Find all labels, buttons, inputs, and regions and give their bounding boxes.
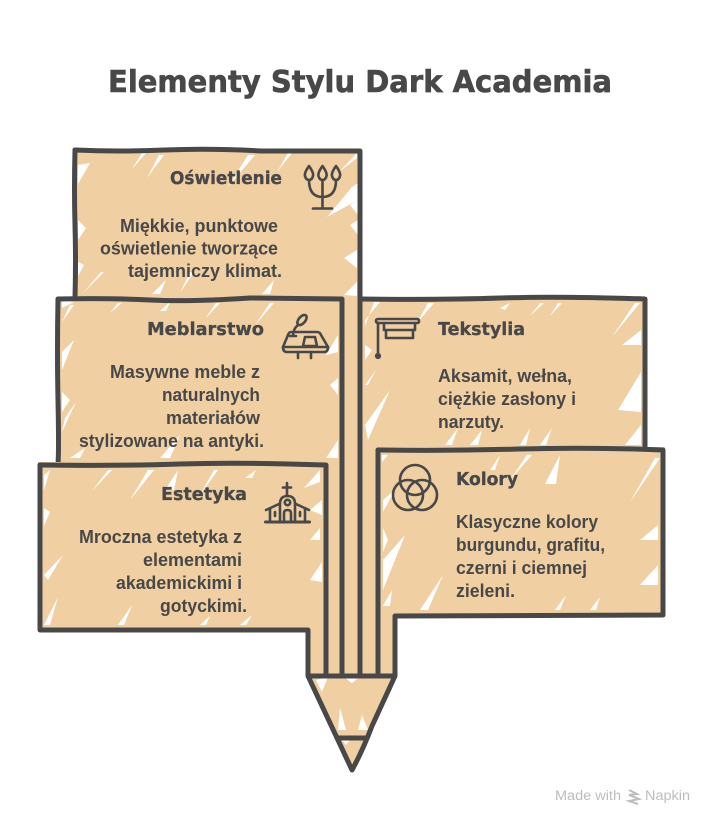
- icon: Napkin logo: [629, 790, 639, 804]
- pencil tip: [308, 675, 395, 770]
- text: Meblarstwo description: Masywne meble z: [110, 362, 260, 382]
- icon: curtain rail: [376, 319, 419, 358]
- text: Kolory description: burgundu, grafitu,: [456, 535, 605, 555]
- footer: Made with Napkin: [555, 788, 690, 804]
- heading: Meblarstwo: Meblarstwo: [147, 319, 264, 340]
- text: Estetyka description: gotyckimi.: [160, 596, 247, 616]
- panel: Tekstylia: [360, 297, 646, 677]
- text: Estetyka description: Mroczna estetyka z: [79, 527, 242, 547]
- heading: Kolory: Kolory: [456, 469, 518, 490]
- text: Kolory description: czerni i ciemnej: [456, 558, 587, 578]
- heading: Oświetlenie: Oświetlenie: [170, 168, 282, 189]
- title: Elementy Stylu Dark Academia: [108, 65, 612, 100]
- text: Kolory description: Klasyczne kolory: [456, 512, 598, 532]
- text: Tekstylia description: ciężkie zasłony i: [438, 389, 576, 409]
- heading: Tekstylia: Tekstylia: [438, 319, 525, 340]
- text: Tekstylia description: [438, 366, 576, 432]
- text: Meblarstwo description: [79, 362, 264, 451]
- footer: Made with Napkin: Made with: [555, 788, 621, 803]
- panel: Meblarstwo: [57, 297, 343, 677]
- icon: church: [266, 483, 310, 522]
- text: Oświetlenie description: oświetlenie tworzące: [100, 238, 278, 258]
- icon: overlapping circles: [393, 465, 437, 510]
- text: Estetyka description: elementami: [143, 550, 242, 570]
- panel: Kolory: [377, 447, 665, 677]
- text: Tekstylia description: narzuty.: [438, 412, 504, 432]
- text: Meblarstwo description: materiałów: [166, 408, 261, 428]
- text: Meblarstwo description: stylizowane na antyki.: [79, 431, 264, 451]
- heading: Estetyka: Estetyka: [161, 484, 247, 505]
- text: Tekstylia description: Aksamit, wełna,: [438, 366, 572, 386]
- panel: Estetyka: [38, 462, 327, 677]
- footer: Made with Napkin: Napkin: [645, 788, 690, 803]
- icon: desk with lamp: [283, 313, 328, 358]
- text: Kolory description: zieleni.: [456, 581, 515, 601]
- panel: Oświetlenie: [74, 149, 361, 677]
- text: Oświetlenie description: [100, 216, 282, 281]
- text: Estetyka description: akademickimi i: [116, 573, 242, 593]
- text: Kolory description: [456, 512, 605, 601]
- text: Oświetlenie description: Miękkie, punktowe: [120, 216, 278, 236]
- icon: candelabra: [305, 166, 340, 208]
- text: Estetyka description: [79, 527, 247, 616]
- text: Meblarstwo description: naturalnych: [162, 385, 260, 405]
- text: Oświetlenie description: tajemniczy klimat.: [128, 261, 282, 281]
